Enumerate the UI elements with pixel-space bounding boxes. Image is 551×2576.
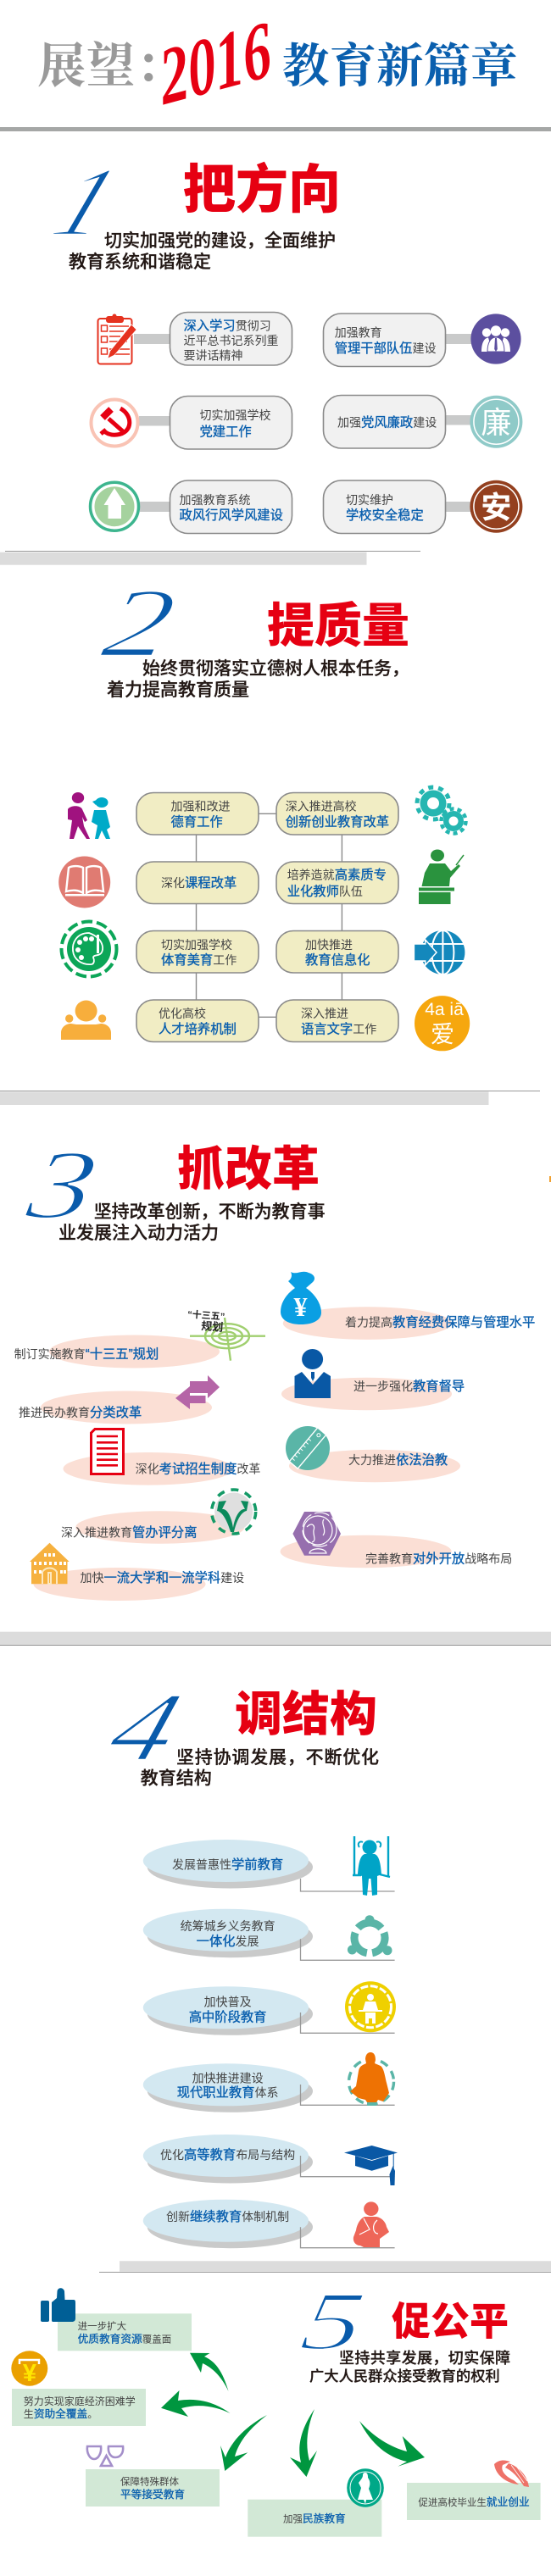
card: 体育美育: 工作 <box>213 953 237 967</box>
card: 德育工作: 德育工作 <box>171 814 223 830</box>
icon: yuan coin <box>11 2351 47 2387</box>
title divider <box>0 127 551 131</box>
card: 民族教育: 加强民族教育 <box>283 2512 346 2525</box>
arrow: to 平等接受教育 <box>220 2415 267 2471</box>
edge sliver <box>549 1176 551 1182</box>
panel: section 5 <box>11 2275 541 2537</box>
card: 学校安全稳定: 学校安全稳定 <box>346 508 424 523</box>
panel: section 4 <box>97 1673 398 2248</box>
card: 政风行风学风: 加强教育系统 <box>180 493 251 507</box>
icon: person in tie <box>295 1349 331 1398</box>
icon: teacher <box>419 849 464 904</box>
card: 管理干部队伍 <box>324 314 446 366</box>
icon: gears <box>417 787 466 834</box>
card: 教师队伍: 业化教师 <box>287 885 339 899</box>
numeral 1: 1 <box>40 147 133 257</box>
icon: money bag: ¥ <box>293 1291 307 1322</box>
card: 体育美育: 体育美育 <box>161 953 213 968</box>
item: 依法治教 <box>289 1450 460 1482</box>
card: 体育美育: 切实加强学校 <box>161 938 232 952</box>
item: 高等教育 <box>143 2135 395 2183</box>
card: 民族教育 <box>248 2500 381 2537</box>
icon: language badge: 爱 <box>431 1021 454 1047</box>
card: 深入学习: 贯彻习 <box>236 319 271 332</box>
card: 德育工作 <box>136 793 259 835</box>
card: 体育美育 <box>136 930 259 973</box>
section 4 intro: 坚持协调发展，不断优化 <box>176 1748 380 1768</box>
item: 学前教育 <box>143 1840 395 1891</box>
item: 考试招生 <box>63 1452 260 1485</box>
icon: 安 badge <box>470 480 522 533</box>
card: 语言文字工作 <box>276 1000 398 1042</box>
icon: 安 badge: 安 <box>481 490 511 525</box>
connectors <box>134 334 475 512</box>
numeral 3: 3 <box>19 1130 107 1240</box>
icon: unity ring <box>348 1915 392 1957</box>
section 3 intro: 业发展注入动力活力 <box>58 1224 219 1243</box>
item: 十三五规划 <box>14 1335 220 1368</box>
item: 继续教育: 创新继续教育体制机制 <box>166 2210 289 2224</box>
card: 深入学习: 深入学习 <box>183 319 236 334</box>
icon: diverging arrows <box>212 1490 256 1534</box>
card: 深入学习 <box>170 312 292 365</box>
heading: 把方向: 把方向 <box>183 161 341 219</box>
item: 高中阶段教育: 加快普及 <box>204 1995 252 2008</box>
icon: ruler <box>286 1426 330 1470</box>
icon: clipboard <box>98 314 136 364</box>
grid connectors <box>197 813 342 1017</box>
card: 教育信息化: 教育信息化 <box>305 953 370 968</box>
divider band 4 <box>99 2261 551 2273</box>
card: 资助全覆盖 <box>12 2389 146 2426</box>
card: 党建工作 <box>170 397 292 449</box>
card: 优质教育资源: 优质教育资源 <box>78 2332 142 2346</box>
card: 优质教育资源: 覆盖面 <box>142 2334 171 2346</box>
card: 资助全覆盖: 生 <box>24 2408 34 2420</box>
card: 教师队伍: 队伍 <box>339 885 363 898</box>
section 1 intro: 教育系统和谐稳定 <box>69 253 211 272</box>
item: 管办评分离 <box>61 1511 244 1544</box>
icon: book <box>58 856 110 908</box>
icon: palette <box>61 922 117 976</box>
card: 深入学习: 近平总书记系列重 <box>183 334 278 347</box>
card: 平等接受教育: 平等接受教育 <box>120 2488 185 2501</box>
icon: graduation cap <box>344 2146 398 2185</box>
icon: leaders <box>470 314 521 364</box>
item: 现代职业教育: 现代职业教育体系 <box>177 2086 278 2100</box>
section 4 intro: 教育结构 <box>141 1769 212 1788</box>
item: 依法治教: 大力推进依法治教 <box>348 1453 448 1468</box>
icon: yuan coin: ¥ <box>23 2360 36 2387</box>
card: 党风廉政 <box>324 395 446 448</box>
card: 语言文字工作: 工作 <box>353 1022 376 1035</box>
section 2 intro: 着力提高教育质量 <box>107 680 249 700</box>
card: 政风行风学风 <box>170 480 292 534</box>
numeral 2: 2 <box>94 569 184 678</box>
card: 人才培养机制: 人才培养机制 <box>159 1022 237 1037</box>
icon: target <box>187 1307 265 1361</box>
card: 创新创业教育改革: 深入推进高校 <box>286 800 357 813</box>
card: 优质教育资源 <box>58 2313 192 2351</box>
icon: balance cups <box>87 2446 123 2466</box>
card: 管理干部队伍: 建设 <box>412 341 436 355</box>
icon: 廉 badge <box>470 396 522 448</box>
icon: ethnic dancer <box>347 2468 384 2507</box>
item: 义务教育一体化: 一体化发展 <box>197 1935 259 1949</box>
card: 党建工作: 党建工作 <box>200 425 252 439</box>
icon: student at desk <box>345 1981 396 2032</box>
card: 教师队伍 <box>276 862 398 903</box>
icon: child on swing <box>353 1836 390 1896</box>
card: 管理干部队伍: 加强教育 <box>335 325 382 339</box>
item: 继续教育 <box>143 2200 395 2248</box>
card: 创新创业教育改革: 创新创业教育改革 <box>286 815 389 830</box>
divider band 3 <box>0 1632 551 1646</box>
icon: up arrow <box>90 482 139 530</box>
icon: students <box>68 792 110 839</box>
numeral 4: 4 <box>97 1673 194 1781</box>
arrow: to 优质教育资源 <box>190 2353 229 2391</box>
icon: globe hexagon <box>292 1512 341 1556</box>
card: 人才培养机制 <box>136 1000 259 1042</box>
card: 学校安全稳定: 切实维护 <box>346 493 393 507</box>
card: 平等接受教育: 保障特殊群体 <box>120 2476 179 2488</box>
item: 高中阶段教育: 高中阶段教育 <box>189 2010 266 2025</box>
card: 教师队伍: 培养造就 <box>287 868 335 881</box>
card: 课程改革: 深化课程改革 <box>161 876 237 891</box>
item: 考试招生: 深化考试招生制度改革 <box>136 1463 260 1476</box>
card: 党风廉政: 加强党风廉政建设 <box>337 415 437 430</box>
card: 深入学习: 要讲话精神 <box>183 349 242 363</box>
item: 对外开放 <box>281 1535 512 1568</box>
title <box>37 4 518 122</box>
card: 党建工作: 切实加强学校 <box>200 408 271 422</box>
item: 分类改革 <box>19 1391 212 1424</box>
card: 就业创业 <box>407 2483 541 2520</box>
icon: language badge: 4a iā <box>425 1000 464 1019</box>
card: 课程改革 <box>136 862 259 903</box>
item: 义务教育一体化: 统筹城乡义务教育 <box>181 1919 276 1933</box>
card: 教育信息化: 加快推进 <box>305 938 353 952</box>
card: 学校安全稳定 <box>324 480 446 534</box>
icon: backpack learner <box>353 2201 389 2247</box>
card: 语言文字工作: 深入推进 <box>301 1007 348 1020</box>
icon: language badge <box>415 996 470 1051</box>
icon: target: “十三五” <box>187 1307 225 1323</box>
icon: document <box>92 1429 124 1474</box>
card: 政风行风学风: 政风行风学风建设 <box>180 508 283 523</box>
card: 资助全覆盖: 努力实现家庭经济困难学 <box>24 2395 136 2407</box>
item: 高中阶段教育 <box>143 1986 395 2035</box>
section 3 intro: 坚持改革创新，不断为教育事 <box>94 1202 326 1222</box>
item: 经费保障: 着力提高教育经费保障与管理水平 <box>345 1315 535 1330</box>
icon: campus building <box>30 1543 70 1584</box>
item: 现代职业教育 <box>143 2063 395 2112</box>
icon: party emblem <box>92 400 137 446</box>
divider band 2 <box>0 1091 540 1105</box>
heading: 抓改革: 抓改革 <box>177 1142 320 1196</box>
heading: 调结构: 调结构 <box>235 1688 377 1740</box>
item: 一流大学: 加快一流大学和一流学科建设 <box>80 1571 244 1585</box>
card: 管理干部队伍: 管理干部队伍 <box>335 341 412 356</box>
item: 高等教育: 优化高等教育布局与结构 <box>160 2147 295 2162</box>
section 5 intro: 坚持共享发展，切实保障 <box>339 2350 510 2367</box>
item: 一流大学 <box>34 1568 244 1601</box>
item: 义务教育一体化 <box>143 1909 395 1960</box>
icon: worker <box>349 2052 393 2106</box>
panel: section 3 <box>14 1130 551 1601</box>
item: 对外开放: 完善教育对外开放战略布局 <box>365 1552 512 1566</box>
item: 经费保障 <box>283 1307 535 1340</box>
card: 平等接受教育 <box>86 2469 220 2507</box>
card: 教师队伍: 高素质专 <box>335 868 387 883</box>
heading: 提质量: 提质量 <box>267 599 409 652</box>
section 5 intro: 广大人民群众接受教育的权利 <box>309 2368 500 2384</box>
section 2 intro: 始终贯彻落实立德树人根本任务， <box>142 659 409 679</box>
icon: money bag <box>281 1272 321 1324</box>
numeral 5: 5 <box>295 2275 371 2368</box>
card: 资助全覆盖: 资助全覆盖。 <box>34 2408 97 2420</box>
title: blue words: 教育新篇章 <box>282 41 518 93</box>
card: 教育信息化 <box>276 930 398 973</box>
arrow: to 就业创业 <box>359 2421 425 2467</box>
title: red year: 2016 <box>154 4 276 122</box>
item: 督导: 进一步强化教育督导 <box>353 1380 465 1394</box>
icon: target: 规划 <box>201 1319 224 1334</box>
icon: thumbs up <box>41 2288 75 2322</box>
card: 优质教育资源: 进一步扩大 <box>78 2320 127 2332</box>
item: 分类改革: 推进民办教育分类改革 <box>19 1406 142 1420</box>
icon: globe with arrow <box>414 930 465 974</box>
card: 语言文字工作: 语言文字 <box>301 1022 353 1037</box>
item: 学前教育: 发展普惠性学前教育 <box>172 1857 283 1873</box>
item: 现代职业教育: 加快推进建设 <box>192 2071 264 2085</box>
arrow: to 民族教育 <box>290 2409 317 2477</box>
icon: three people <box>61 1000 111 1040</box>
panel: section 1 <box>40 147 522 534</box>
divider band 1 <box>0 551 420 565</box>
card: 人才培养机制: 优化高校 <box>159 1007 206 1020</box>
icon: 廉 badge: 廉 <box>481 405 511 440</box>
section 1 intro: 切实加强党的建设，全面维护 <box>104 231 336 251</box>
heading: 促公平: 促公平 <box>392 2300 509 2344</box>
item: 管办评分离: 深入推进教育管办评分离 <box>61 1525 197 1541</box>
item: 督导 <box>281 1378 465 1410</box>
arrow: to 资助全覆盖 <box>161 2390 231 2417</box>
card: 创新创业教育改革 <box>276 793 398 835</box>
card: 德育工作: 加强和改进 <box>171 800 231 813</box>
icon: opposing arrows <box>175 1375 220 1409</box>
panel: section 2 <box>58 569 470 1051</box>
item: 十三五规划: 制订实施教育“十三五”规划 <box>14 1347 159 1362</box>
icon: clasped hands <box>494 2460 529 2487</box>
title: grey lead: 展望： <box>37 40 185 93</box>
card: 就业创业: 促进高校毕业生就业创业 <box>418 2496 530 2508</box>
